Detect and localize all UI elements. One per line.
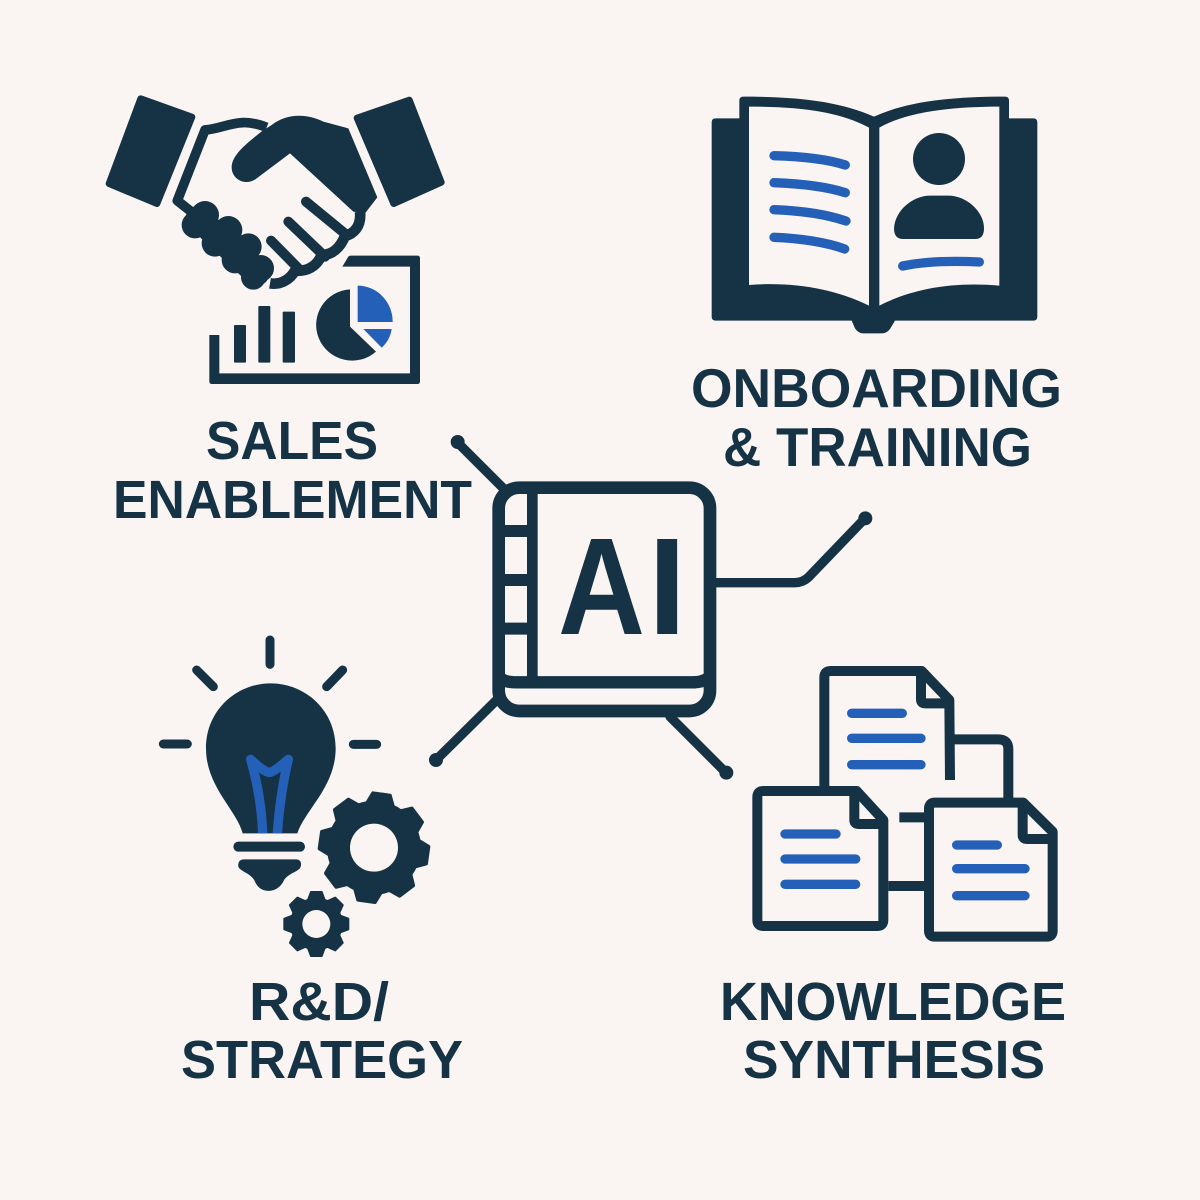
- heading: knowledge synthesis: [720, 972, 1066, 1090]
- heading: onboarding and training: ONBOARDING: [691, 357, 1062, 419]
- heading: sales enablement: [113, 411, 472, 530]
- panel: onboarding and training: [691, 97, 1062, 478]
- label: AI: I: [648, 510, 686, 664]
- top document: [824, 671, 950, 787]
- heading: sales enablement: SALES: [206, 411, 378, 471]
- central AI book with connectors: [429, 435, 872, 780]
- icon: presentation chart: [209, 256, 420, 384]
- icon: large gear: [313, 787, 435, 909]
- panel: sales enablement: [109, 99, 472, 530]
- heading: knowledge synthesis: KNOWLEDGE: [720, 972, 1066, 1032]
- icon: handshake: [109, 99, 441, 290]
- icon: light bulb with gears: [163, 640, 435, 956]
- heading: onboarding and training: [691, 357, 1062, 478]
- panel: R&D strategy: [163, 640, 463, 1090]
- heading: R&D strategy: STRATEGY: [181, 1030, 463, 1090]
- heading: sales enablement: ENABLEMENT: [113, 470, 472, 530]
- heading: onboarding and training: & TRAINING: [723, 416, 1032, 478]
- icon: linked documents: [757, 671, 1053, 937]
- panel: knowledge synthesis: [720, 671, 1066, 1090]
- document connectors: [888, 739, 1008, 886]
- heading: knowledge synthesis: SYNTHESIS: [743, 1030, 1045, 1090]
- icon: small gear: [284, 892, 348, 956]
- heading: R&D strategy: R&D/: [249, 972, 389, 1032]
- icon: open book with profile: [712, 97, 1037, 333]
- left document: [757, 791, 883, 926]
- label: AI: A: [558, 510, 645, 664]
- right document: [929, 803, 1053, 937]
- connector lines: [429, 435, 872, 780]
- heading: R&D strategy: [181, 972, 463, 1090]
- icon: AI book: [499, 488, 710, 711]
